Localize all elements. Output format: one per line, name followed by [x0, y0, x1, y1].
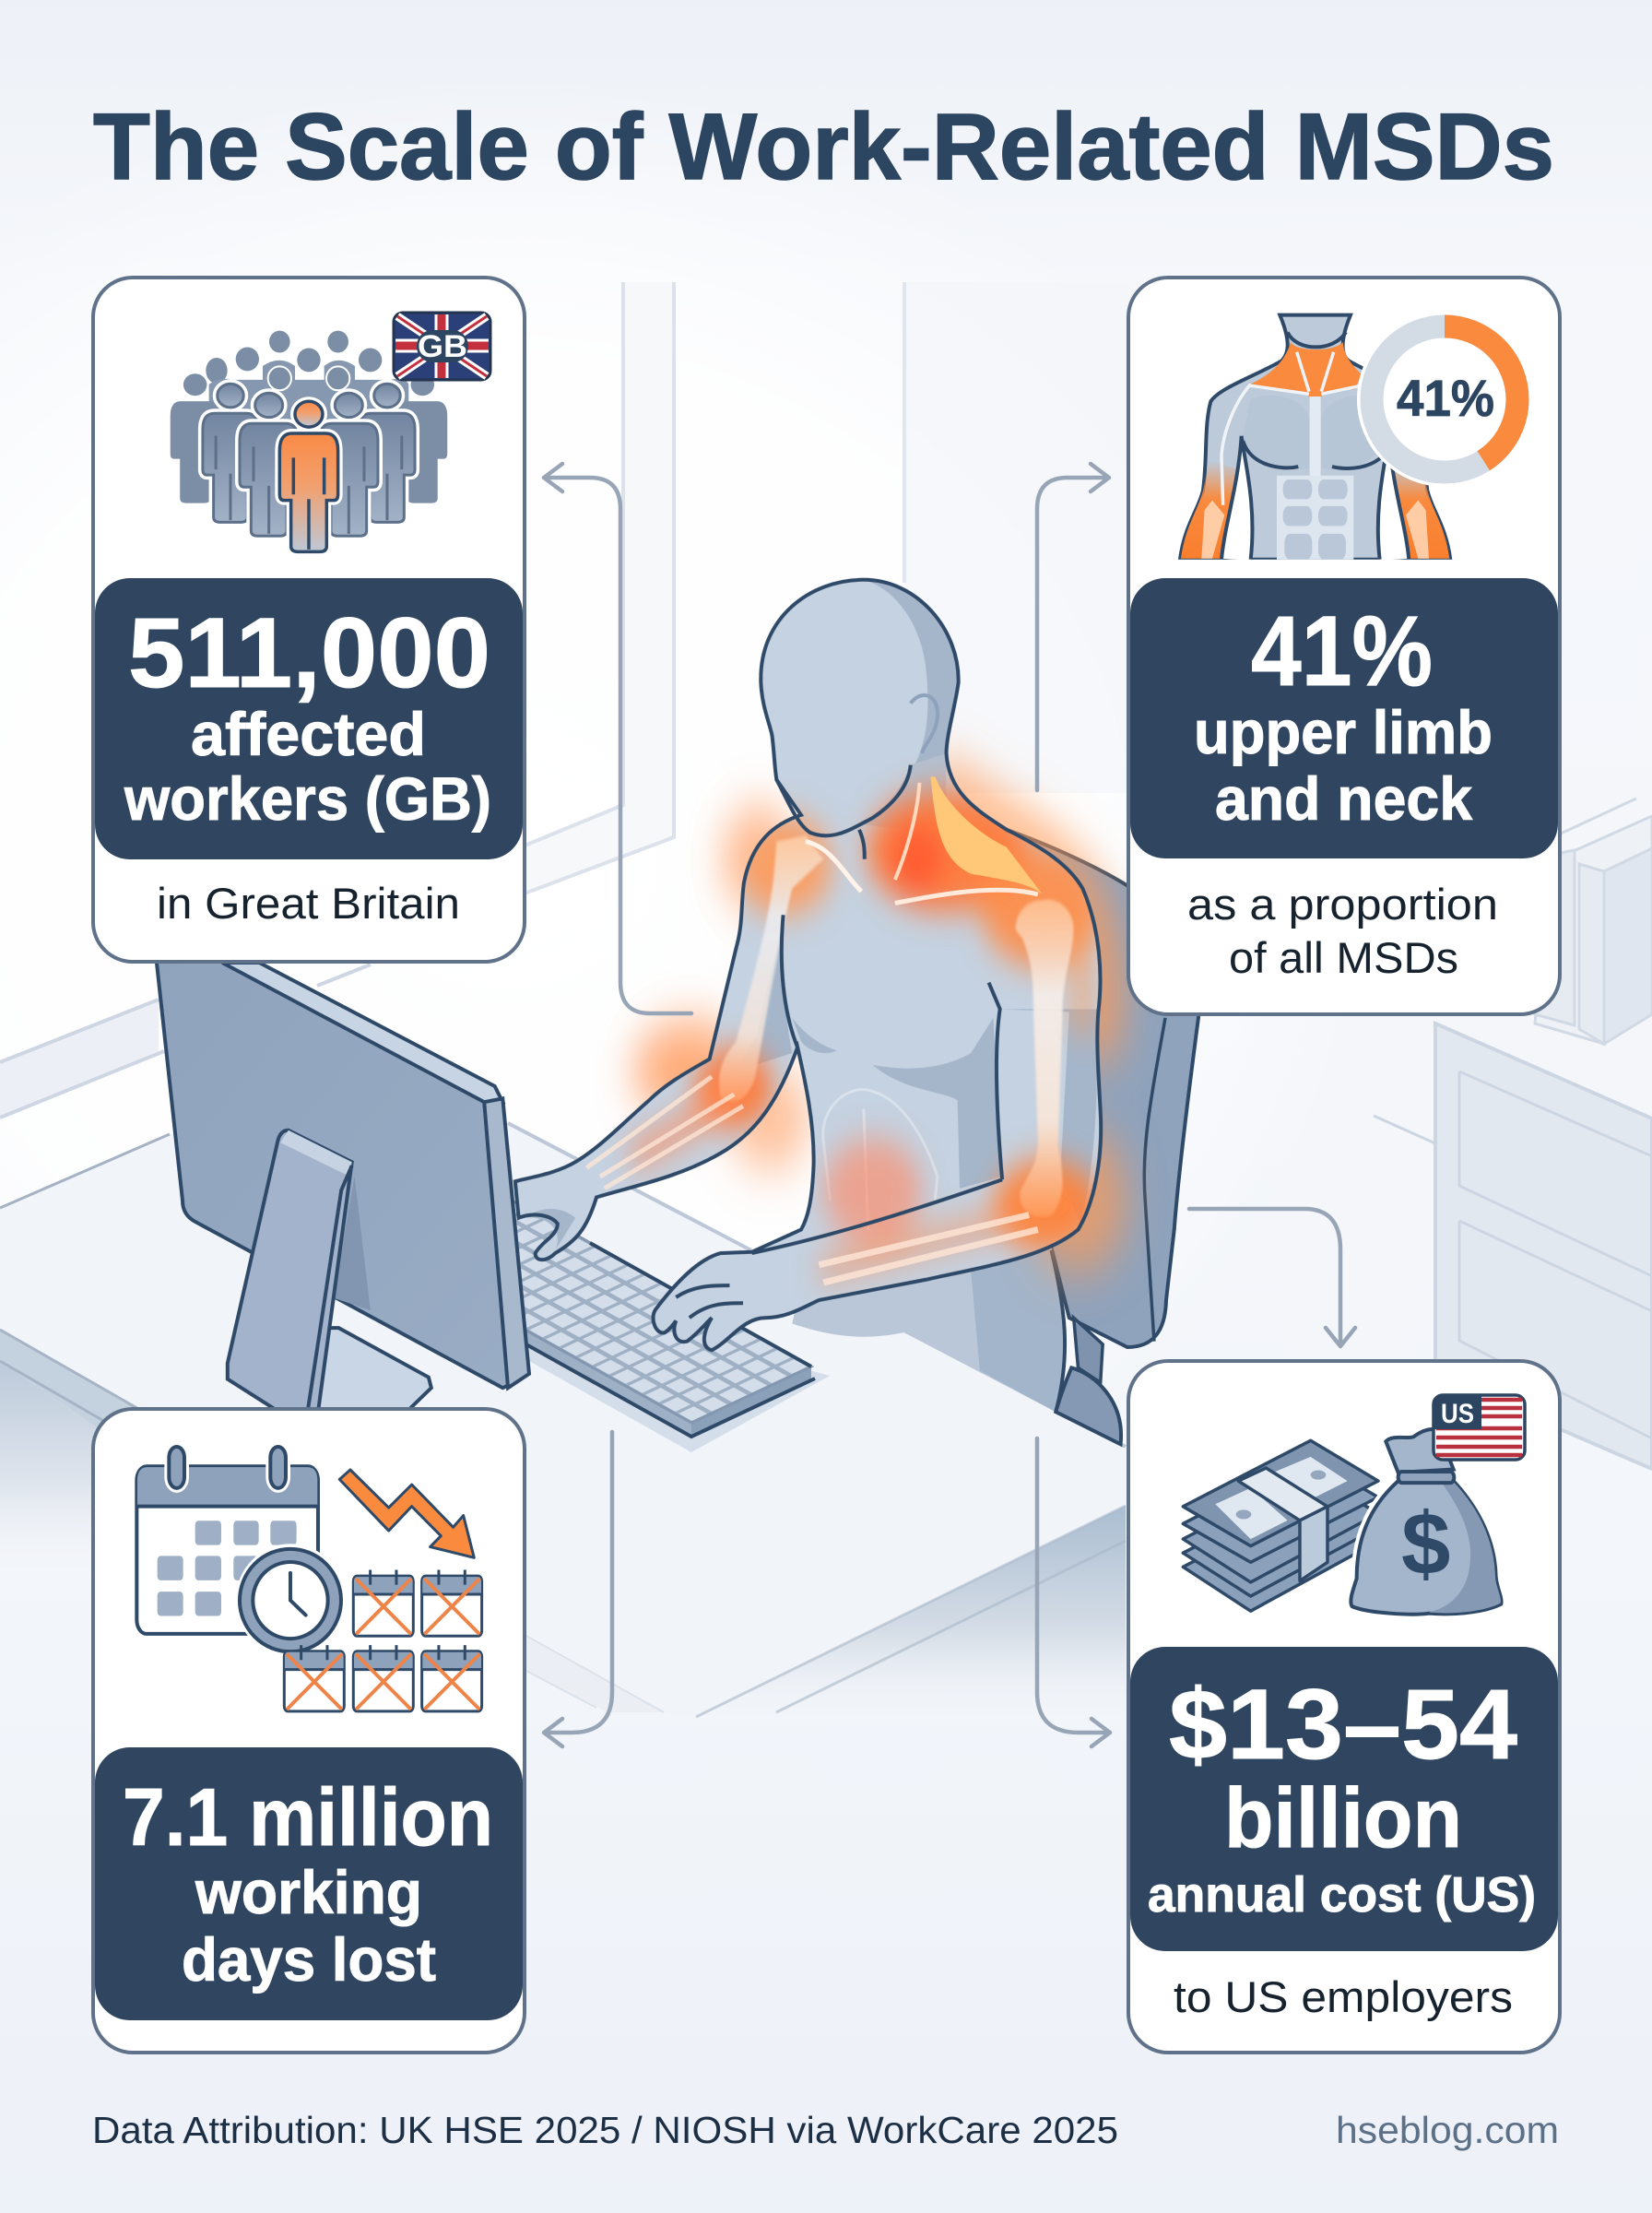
stat panel: affected: [191, 700, 426, 768]
stat panel: workers (GB): [124, 764, 491, 833]
caption: as a proportion: [1187, 880, 1498, 929]
data attribution: Data Attribution: UK HSE 2025 / NIOSH via WorkCare 2025: [92, 2109, 1118, 2151]
icon: US flag: US: [1441, 1399, 1474, 1429]
panel: upper limb and neck: [1128, 278, 1560, 1014]
stat panel: upper limb: [1194, 698, 1493, 766]
arrow to days lost card: [544, 1432, 612, 1746]
outer pain halo: [633, 771, 1127, 1273]
body outlines: [515, 580, 1101, 1350]
connector arrows: [544, 464, 1355, 1746]
right cabinet: [1435, 1024, 1652, 1469]
icon: GB flag: [394, 313, 490, 380]
chair: [1007, 830, 1203, 1382]
stat panel: working: [195, 1858, 422, 1926]
chart: 41% donut: 41%: [1397, 369, 1494, 427]
monitor back: [156, 957, 511, 1388]
title: The Scale of Work-Related MSDs: [93, 94, 1554, 199]
left wall and floor: [0, 1000, 159, 1118]
body shading: [524, 580, 1098, 1250]
icon: US flag: [1434, 1395, 1525, 1460]
icon: cash stack: [1183, 1440, 1378, 1611]
stomach outline: [823, 1090, 938, 1229]
icon: torso with highlighted neck and arms: [1168, 315, 1463, 569]
site credit: hseblog.com: [1336, 2109, 1559, 2151]
desk surface: [0, 1123, 1126, 1717]
arrow to workers card: [544, 464, 691, 1013]
monitor stand: [228, 1130, 352, 1416]
caption: [1187, 880, 1498, 982]
panel: affected workers: [93, 278, 525, 962]
stat panel: 41%: [1251, 595, 1433, 706]
body silhouette: [515, 580, 1101, 1350]
arrow to upper limb card: [1037, 464, 1109, 790]
stat panel: billion: [1224, 1771, 1462, 1865]
stat panel: [1130, 1647, 1558, 1951]
right shelf boxes: [1535, 799, 1652, 1044]
icon: money bag: [1351, 1429, 1502, 1615]
icon: crowd of workers: [171, 331, 447, 551]
panel: annual cost: [1128, 1361, 1560, 2053]
icon: calendar with clock and downward arrow: [136, 1447, 482, 1711]
pain colour on body: [631, 788, 1105, 1271]
stat panel: [95, 578, 523, 859]
keyboard: [396, 1201, 830, 1452]
lower body: [792, 1229, 1121, 1444]
bones: [719, 835, 1074, 1216]
icon: GB flag: GB: [418, 329, 467, 364]
arrow to cost card lower: [1037, 1438, 1110, 1746]
stat panel: days lost: [182, 1925, 436, 1994]
monitor base: [296, 1328, 431, 1416]
caption: in Great Britain: [157, 879, 460, 928]
stat panel: [95, 1747, 523, 2020]
stat panel: [1130, 578, 1558, 858]
stat panel: $13–54: [1169, 1668, 1517, 1780]
caption: to US employers: [1174, 1972, 1513, 2021]
caption: of all MSDs: [1229, 933, 1458, 982]
window frame: [525, 282, 674, 893]
seated figure with pain hotspots: [515, 580, 1127, 1444]
stat panel: annual cost (US): [1148, 1867, 1536, 1923]
stat panel: 7.1 million: [123, 1771, 493, 1863]
arrow to cost card: [1189, 1209, 1355, 1346]
monitor: [156, 957, 529, 1416]
chart: 41% donut: [1357, 312, 1532, 487]
panel: working days lost: [93, 1409, 525, 2053]
stat panel: 511,000: [128, 597, 490, 708]
dollar sign: $: [1401, 1495, 1450, 1593]
stat panel: and neck: [1215, 764, 1472, 833]
